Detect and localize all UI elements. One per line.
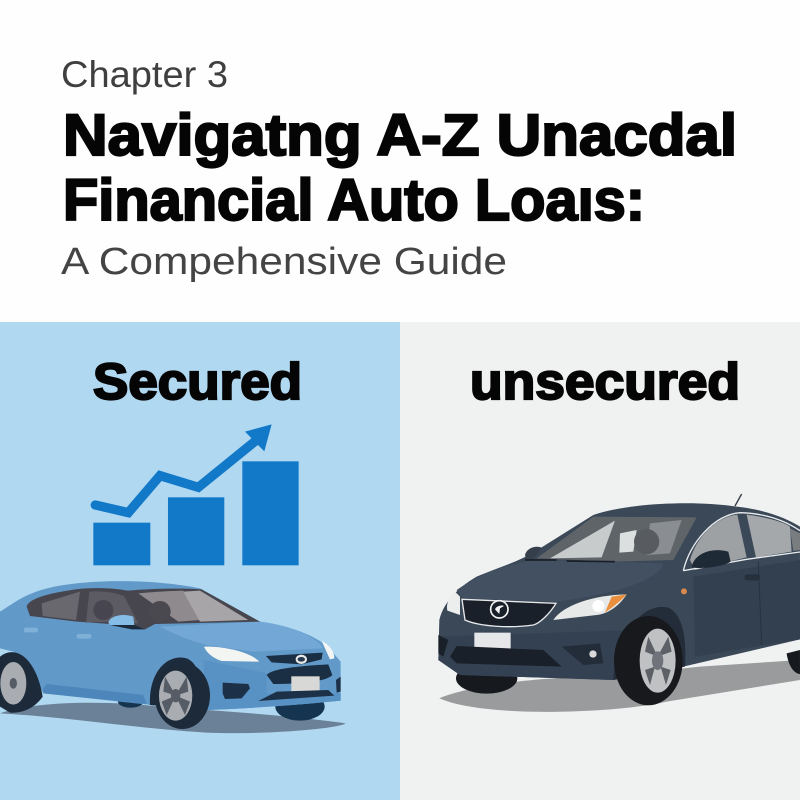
grille xyxy=(462,599,556,627)
rear wheel xyxy=(0,652,43,713)
chapter label: Chapter 3 xyxy=(61,54,228,95)
wiper xyxy=(525,560,615,562)
heading: secured: Secured xyxy=(93,353,302,410)
windshield xyxy=(537,517,697,562)
windows xyxy=(27,588,260,629)
panel: secured xyxy=(0,322,400,800)
mirror xyxy=(108,615,134,625)
panel: unsecured xyxy=(400,322,800,800)
wheel arch and front wheel xyxy=(613,607,685,680)
title: Financial Auto Loaıs: xyxy=(63,168,645,233)
bar chart with rising arrow xyxy=(93,424,299,565)
lower bumper xyxy=(450,646,562,667)
mirrors xyxy=(692,550,731,568)
plate xyxy=(474,633,511,655)
headlights xyxy=(553,594,627,620)
icon: dark car xyxy=(438,494,800,712)
headlight xyxy=(204,647,259,662)
icon: blue car xyxy=(0,581,346,733)
front wheel arch and wheel xyxy=(150,658,205,710)
subtitle: A Compehensive Guide xyxy=(61,241,507,283)
door handles xyxy=(24,628,38,632)
heading: unsecured: unsecured xyxy=(470,353,740,410)
door seams and handle xyxy=(758,562,762,645)
grille xyxy=(266,653,323,664)
title xyxy=(63,103,737,233)
title: Navigatng A-Z Unacdal xyxy=(63,103,737,168)
side windows xyxy=(690,515,747,570)
